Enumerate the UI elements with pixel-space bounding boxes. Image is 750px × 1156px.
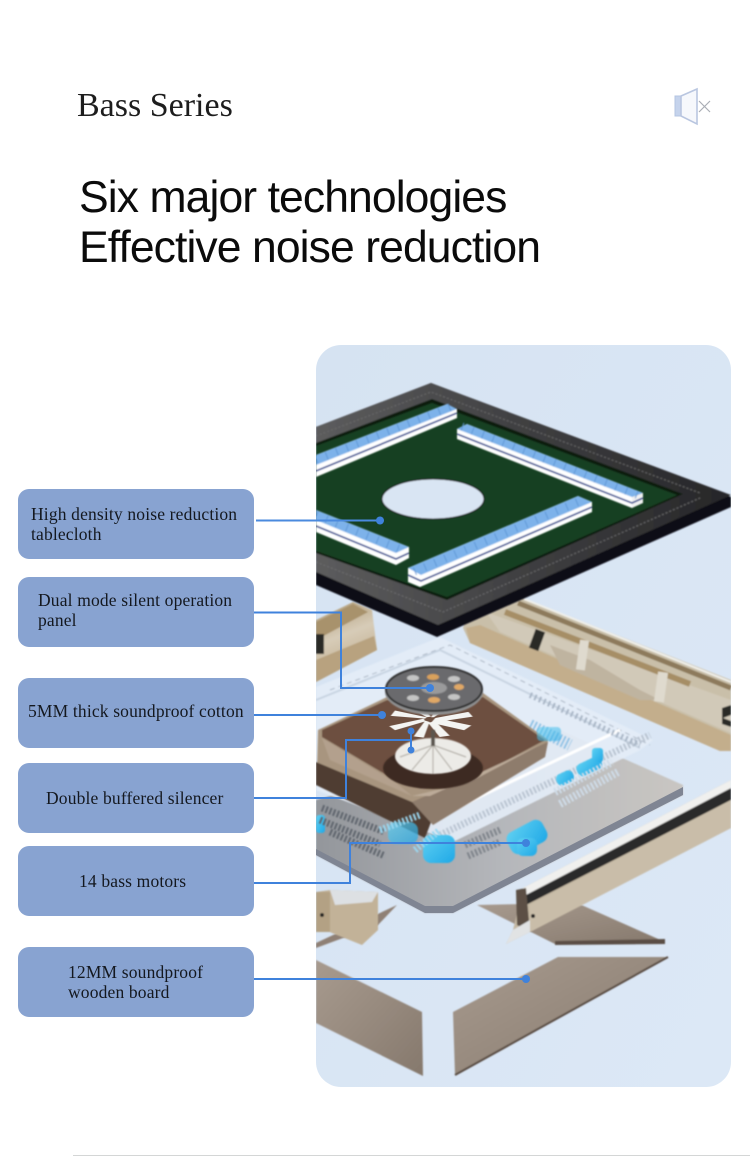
table frame xyxy=(316,383,731,637)
leader line: wooden board xyxy=(254,975,530,983)
label: wooden board: wooden board xyxy=(68,982,170,1002)
motors xyxy=(316,727,604,863)
tile row 4 xyxy=(408,496,592,587)
label: silencer xyxy=(18,763,254,833)
front wooden boards xyxy=(316,957,668,1076)
title: Six major technologies: Six major technologies xyxy=(79,173,506,222)
leader line: operation panel xyxy=(254,612,434,692)
lower fan opening xyxy=(382,754,484,790)
leader line: tablecloth xyxy=(256,516,384,524)
label: motors xyxy=(18,846,254,916)
label: operation panel: Dual mode silent operation xyxy=(38,590,232,610)
leader line: soundproof cotton xyxy=(254,711,386,719)
heading: Bass Series: Bass Series xyxy=(77,87,233,124)
label: motors: 14 bass motors xyxy=(79,871,186,891)
illustration panel: exploded table xyxy=(316,345,731,1087)
tile row 2 xyxy=(457,424,643,508)
title: Six major technologies xyxy=(79,173,540,272)
label: tablecloth xyxy=(18,489,254,559)
label: silencer: Double buffered silencer xyxy=(46,788,223,808)
label: operation panel xyxy=(18,577,254,647)
bottom divider xyxy=(73,1155,750,1156)
panel background xyxy=(316,345,731,1087)
upper silencer fan xyxy=(388,710,474,738)
label: soundproof cotton: 5MM thick soundproof cotton xyxy=(28,701,244,721)
back right rail xyxy=(463,598,731,751)
icon: muted speaker xyxy=(674,88,710,126)
leader line: silencer xyxy=(254,728,414,799)
transparent frame base plate xyxy=(316,758,684,914)
corner block xyxy=(316,890,378,945)
left rail xyxy=(316,602,377,682)
label: tablecloth: High density noise reduction xyxy=(31,504,237,524)
label: operation panel: panel xyxy=(38,610,77,630)
leader line: motors xyxy=(254,839,530,884)
back wooden boards xyxy=(316,903,665,948)
brown soundproof cotton box xyxy=(316,693,548,838)
operation panel disc xyxy=(385,667,483,715)
tile row 1 xyxy=(316,404,457,477)
motor and frame speckle xyxy=(320,762,618,856)
label: tablecloth: tablecloth xyxy=(31,524,102,544)
tile row 3 xyxy=(316,510,409,565)
clear acrylic frame xyxy=(316,637,653,842)
label: wooden board: 12MM soundproof xyxy=(68,962,203,982)
label: wooden board xyxy=(18,947,254,1017)
lower silencer cone xyxy=(395,730,471,774)
title: Six major technologies: Effective noise reduction xyxy=(79,223,540,272)
front right rail xyxy=(506,780,731,944)
label: soundproof cotton xyxy=(18,678,254,748)
